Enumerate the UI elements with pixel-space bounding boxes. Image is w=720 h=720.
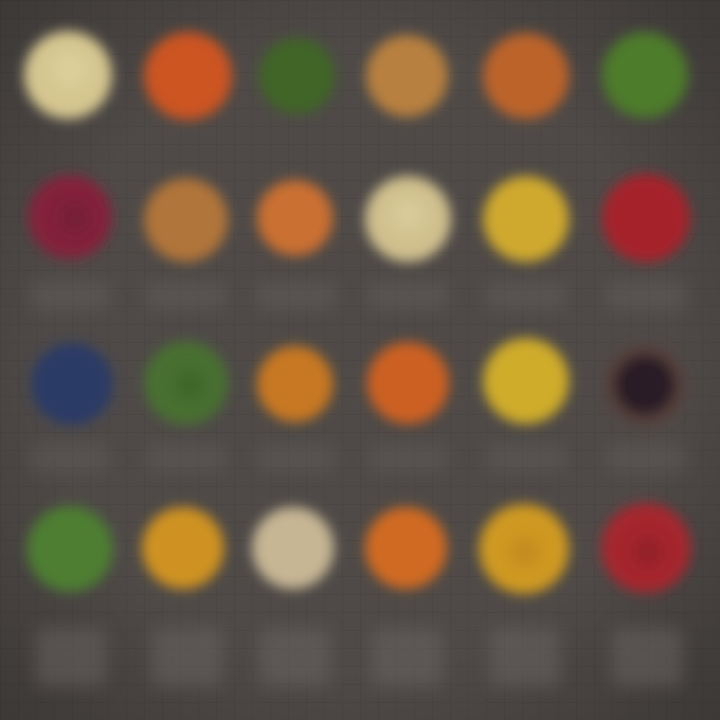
row 3 circles xyxy=(31,338,686,426)
row 2 circles xyxy=(28,174,690,262)
label placeholders: blurred text blocks under row 2 xyxy=(30,282,686,310)
label placeholders: blurred text blocks under row 4 xyxy=(36,628,682,686)
circle highlights and texture xyxy=(52,52,664,568)
label placeholders: blurred text blocks under row 3 xyxy=(30,444,686,472)
row 4 circles xyxy=(27,503,691,594)
row 1 circles xyxy=(24,31,688,120)
